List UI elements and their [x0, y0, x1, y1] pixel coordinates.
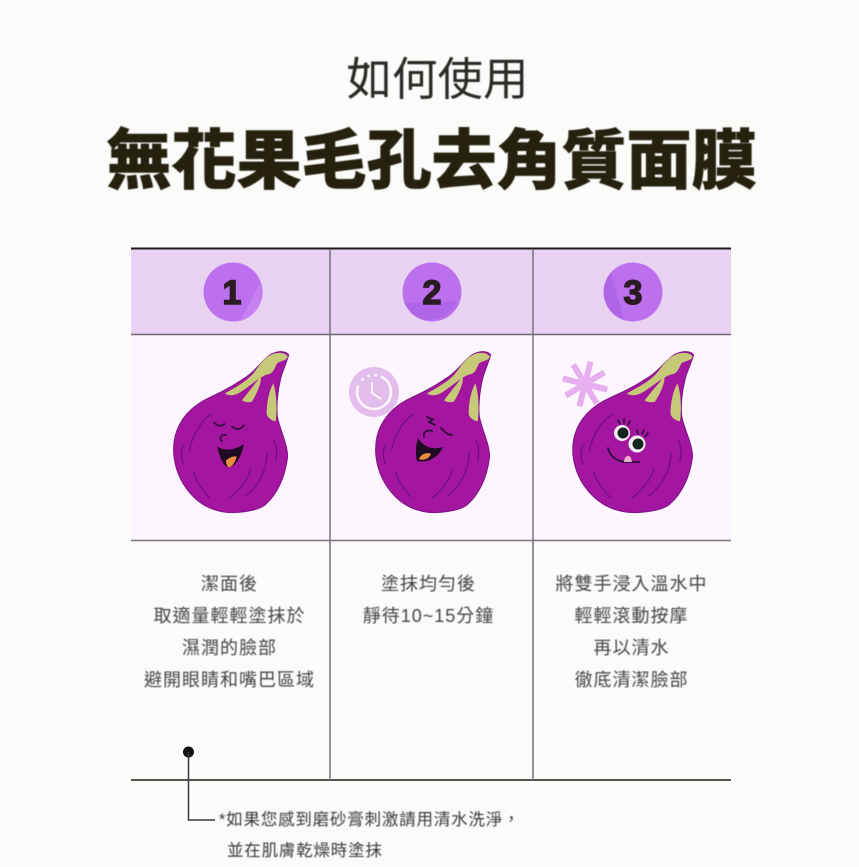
step 3 text: 徹底清潔臉部: [574, 670, 688, 690]
sparkle asterisk icon: [557, 356, 613, 412]
title: 無花果毛孔去角質面膜: [106, 124, 756, 197]
subtitle: 如何使用: [346, 54, 528, 105]
step badge 3: 3: [624, 274, 642, 312]
clock icon: [349, 367, 399, 417]
fig character 2: smiling: [376, 352, 491, 513]
step 2 text: 塗抹均勻後: [381, 574, 476, 594]
footnote: *如果您感到磨砂膏刺激請用清水洗淨，: [219, 811, 520, 829]
step 1 text: 濕潤的臉部: [182, 638, 277, 658]
step 3 text: 輕輕滾動按摩: [574, 606, 688, 626]
step 3 text: 將雙手浸入溫水中: [556, 574, 708, 594]
step 3 text: [556, 574, 708, 690]
step badge 1: 1: [223, 274, 241, 312]
footnote: 並在肌膚乾燥時塗抹: [227, 842, 383, 860]
step 2 text: 靜待10~15分鐘: [363, 606, 494, 626]
illustration band: [131, 335, 731, 540]
step 1 text: 取適量輕輕塗抹於: [154, 606, 306, 626]
footnote: [218, 810, 520, 860]
footnote pointer: [183, 746, 215, 820]
step 1 text: 避開眼睛和嘴巴區域: [144, 670, 315, 690]
step badge 3: [604, 262, 662, 322]
step badge 2: 2: [423, 274, 441, 312]
step badge 1: [204, 262, 262, 322]
step 2 text: [363, 574, 494, 626]
step 3 text: 再以清水: [594, 638, 670, 658]
fig character 3: surprised: [573, 352, 694, 513]
fig character 1: laughing: [174, 352, 289, 513]
step badge 2: [402, 262, 462, 322]
header band: [131, 249, 731, 334]
step 1 text: [144, 574, 315, 690]
step 1 text: 潔面後: [201, 574, 258, 594]
